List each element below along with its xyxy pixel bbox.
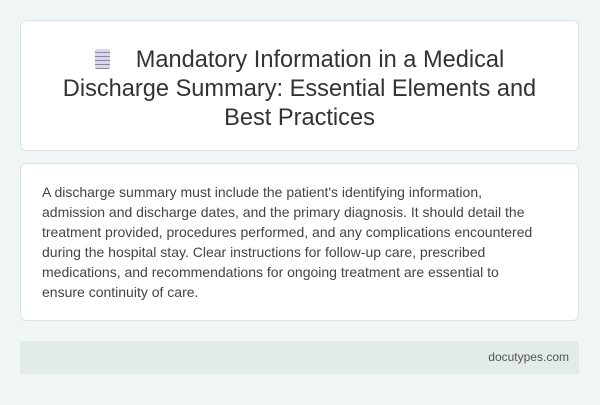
text block: treatment provided, procedures performed, and any complications encountered [42,224,532,240]
footer: source [20,341,579,374]
panel: title card [20,20,579,151]
icon: document [95,49,110,69]
title [63,47,536,131]
title: Mandatory Information in a Medical [136,47,504,73]
text block [42,184,532,300]
text block: medications, and recommendations for ongoing treatment are essential to [42,264,499,280]
text block: admission and discharge dates, and the primary diagnosis. It should detail the [42,204,525,220]
panel: description text [20,163,579,321]
title: Best Practices [224,105,375,131]
title: Discharge Summary: Essential Elements and [63,76,536,102]
text block: ensure continuity of care. [42,284,198,300]
text block: A discharge summary must include the patient's identifying information, [42,184,482,200]
text block: during the hospital stay. Clear instructions for follow-up care, prescribed [42,244,485,260]
footer: source: docutypes.com [488,350,569,364]
